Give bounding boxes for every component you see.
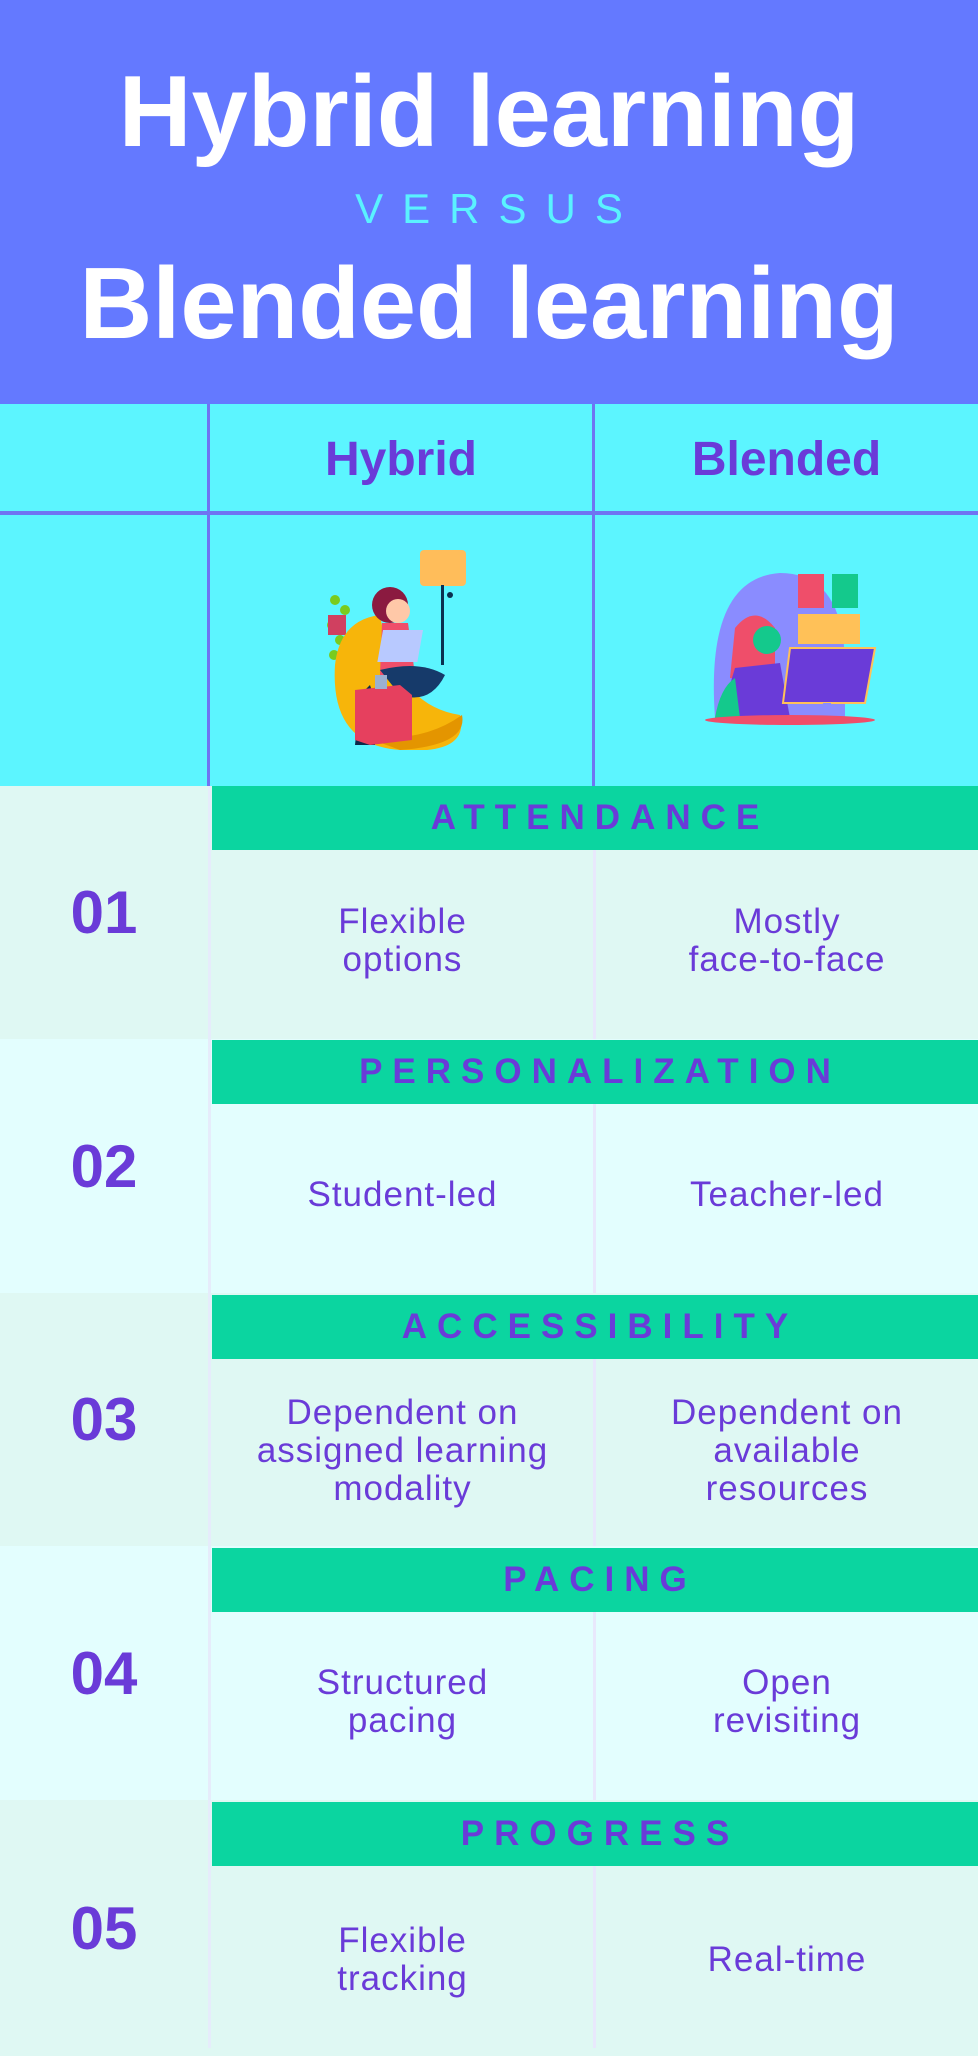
cell: blended pacing: revisiting bbox=[713, 1701, 861, 1740]
cell: hybrid accessibility: Dependent on bbox=[287, 1392, 518, 1432]
column header: Hybrid: Hybrid bbox=[325, 432, 477, 486]
cell: hybrid attendance: options bbox=[343, 940, 462, 978]
cell: hybrid progress: Flexible bbox=[338, 1921, 467, 1960]
header table background bbox=[0, 404, 978, 786]
row 04: pacing bbox=[0, 1546, 978, 1800]
row 03: accessibility bbox=[0, 1293, 978, 1546]
band: PROGRESS bbox=[212, 1802, 978, 1866]
number 04: 04 bbox=[71, 1640, 137, 1706]
icon: hybrid learner on beanbag bbox=[327, 550, 466, 750]
icon: blended learner at computer bbox=[705, 573, 876, 725]
cell: blended accessibility bbox=[671, 1392, 903, 1508]
cell: hybrid accessibility: modality bbox=[333, 1468, 472, 1508]
cell: blended pacing: Open bbox=[742, 1663, 832, 1702]
number 02: 02 bbox=[71, 1132, 137, 1200]
cell: hybrid pacing bbox=[317, 1663, 488, 1740]
cell: blended attendance bbox=[689, 902, 885, 978]
row 01: attendance bbox=[0, 786, 978, 1039]
cell: blended accessibility: available bbox=[713, 1430, 861, 1470]
cell: hybrid personalization: Student-led bbox=[307, 1174, 498, 1214]
band: ATTENDANCE: ATTENDANCE bbox=[431, 798, 769, 837]
header background bbox=[0, 0, 978, 404]
band: PROGRESS: PROGRESS bbox=[461, 1814, 739, 1853]
title: Hybrid learning: Hybrid learning bbox=[119, 56, 859, 168]
cell: blended accessibility: Dependent on bbox=[671, 1392, 903, 1432]
band: PACING bbox=[212, 1548, 978, 1612]
number 05: 05 bbox=[71, 1894, 137, 1962]
cell: blended pacing bbox=[713, 1663, 861, 1740]
band: ACCESSIBILITY bbox=[212, 1295, 978, 1359]
number 03: 03 bbox=[71, 1386, 137, 1453]
column header: Blended: Blended bbox=[692, 432, 881, 486]
band: ACCESSIBILITY: ACCESSIBILITY bbox=[402, 1307, 798, 1346]
cell: hybrid progress: tracking bbox=[337, 1959, 468, 1998]
cell: hybrid pacing: pacing bbox=[348, 1701, 457, 1740]
title: Blended learning: Blended learning bbox=[79, 248, 899, 360]
cell: hybrid pacing: Structured bbox=[317, 1663, 488, 1702]
cell: hybrid attendance: Flexible bbox=[338, 902, 467, 940]
cell: hybrid accessibility: assigned learning bbox=[257, 1430, 548, 1470]
band: PERSONALIZATION bbox=[212, 1040, 978, 1104]
cell: blended accessibility: resources bbox=[706, 1468, 868, 1508]
cell: hybrid attendance bbox=[338, 902, 467, 978]
cell: hybrid progress bbox=[337, 1921, 468, 1998]
cell: hybrid accessibility bbox=[257, 1392, 548, 1508]
cell: blended progress: Real-time bbox=[708, 1940, 866, 1979]
cell: blended attendance: face-to-face bbox=[689, 940, 885, 978]
row 02: personalization bbox=[0, 1039, 978, 1293]
cell: blended attendance: Mostly bbox=[733, 902, 841, 940]
versus label: VERSUS bbox=[355, 185, 642, 232]
cell: blended personalization: Teacher-led bbox=[690, 1174, 884, 1214]
row 05: progress bbox=[0, 1800, 978, 2048]
band: PERSONALIZATION: PERSONALIZATION bbox=[359, 1052, 841, 1091]
band: PACING: PACING bbox=[503, 1560, 697, 1599]
number 01: 01 bbox=[71, 879, 137, 946]
band: ATTENDANCE bbox=[212, 786, 978, 850]
